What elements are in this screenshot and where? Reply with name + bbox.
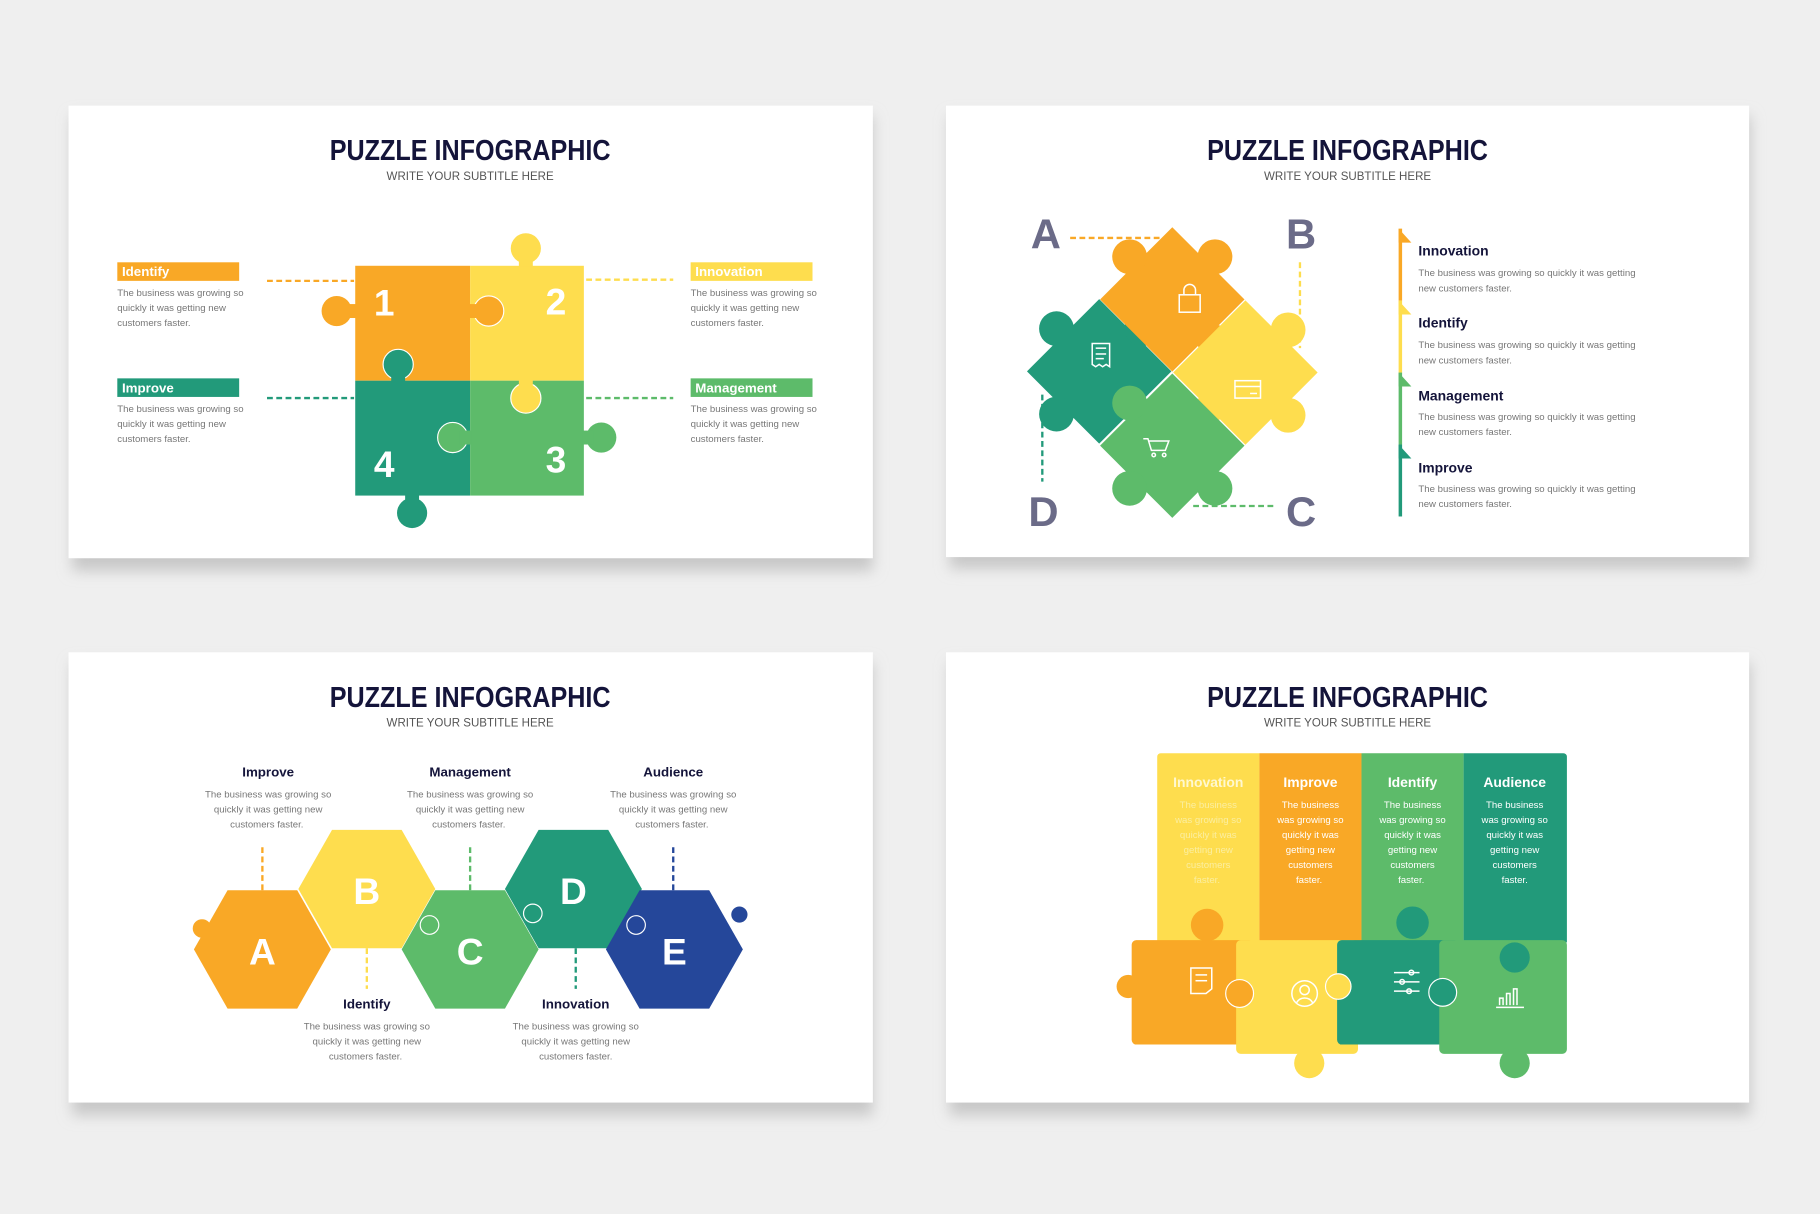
corner letters: C (1286, 488, 1316, 535)
hexagons: C (457, 930, 484, 972)
puzzle square: 3 (546, 438, 566, 480)
bottom puzzle pieces (1117, 906, 1567, 1078)
panel 4: column puzzle (946, 652, 1749, 1103)
timeline: The business was growing so quickly it was getting (1418, 484, 1636, 495)
label: Improve: customers faster. (117, 434, 191, 445)
labels 3: Innovation (542, 997, 609, 1012)
hexagons: E (662, 930, 687, 972)
timeline: new customers faster. (1418, 427, 1512, 438)
label: Management: quickly it was getting new (691, 419, 799, 430)
column texts: Identify (1388, 774, 1438, 790)
label: Identify: The business was growing so (117, 288, 244, 299)
timeline: new customers faster. (1418, 499, 1512, 510)
column texts: faster. (1194, 875, 1220, 886)
labels 3: customers faster. (432, 820, 505, 831)
dashed connectors (267, 280, 673, 398)
column texts: The business (1384, 800, 1441, 811)
timeline: Identify (1418, 314, 1468, 330)
column texts: customers (1492, 860, 1537, 871)
column texts: getting new (1490, 845, 1539, 856)
hexagons (193, 830, 748, 1009)
label: Identify: Identify (122, 264, 170, 279)
labels 3: quickly it was getting new (521, 1037, 630, 1048)
label: Improve (117, 378, 244, 445)
subtitle 3: WRITE YOUR SUBTITLE HERE (387, 717, 554, 730)
columns (1157, 753, 1567, 942)
column texts: faster. (1502, 875, 1528, 886)
label: Improve: Improve (122, 380, 174, 395)
puzzle square: 2 (546, 281, 566, 323)
panel 2: diamond puzzle (946, 106, 1749, 557)
column texts: was growing so (1481, 815, 1548, 826)
label: Innovation: Innovation (695, 264, 763, 279)
label: Identify: quickly it was getting new (117, 303, 226, 314)
column texts: getting new (1388, 845, 1437, 856)
column texts: customers (1186, 860, 1231, 871)
labels 3: The business was growing so (304, 1021, 430, 1032)
column texts (1173, 774, 1548, 886)
puzzle square: 1 (374, 282, 395, 324)
labels 3: quickly it was getting new (313, 1037, 421, 1048)
icons (1191, 968, 1524, 1007)
column texts: quickly it was (1486, 830, 1543, 841)
corner letters: A (1031, 210, 1061, 257)
icon: card (1235, 381, 1261, 398)
column texts: Improve (1283, 774, 1338, 790)
timeline: Management (1418, 387, 1504, 403)
timeline: The business was growing so quickly it was getting (1418, 412, 1636, 423)
labels 3: Identify (343, 997, 391, 1012)
corner letters: D (1028, 488, 1059, 535)
label: Identify: customers faster. (117, 318, 191, 329)
icon: cart (1143, 439, 1169, 457)
column texts: The business (1180, 800, 1237, 811)
labels 3: Improve (242, 764, 294, 779)
labels 3: The business was growing so (610, 789, 736, 800)
labels 3: quickly it was getting new (214, 804, 323, 815)
puzzle diamond (989, 189, 1355, 556)
labels 3: customers faster. (329, 1052, 402, 1063)
title 1: PUZZLE INFOGRAPHIC (330, 135, 611, 167)
labels 3: customers faster. (539, 1052, 612, 1063)
shadows (72, 116, 1750, 1115)
subtitle 1: WRITE YOUR SUBTITLE HERE (387, 170, 554, 183)
label: Improve: The business was growing so (117, 404, 244, 415)
labels 3: customers faster. (635, 820, 709, 831)
timeline: Innovation (1418, 242, 1489, 258)
puzzle square: 4 (374, 443, 395, 485)
label: Innovation (691, 262, 817, 329)
label: Improve: quickly it was getting new (117, 419, 226, 430)
subtitle 4: WRITE YOUR SUBTITLE HERE (1264, 717, 1431, 730)
column texts: Innovation (1173, 774, 1243, 790)
column texts: was growing so (1378, 815, 1446, 826)
hexagons: A (249, 930, 276, 972)
dashed connectors 3 (262, 847, 673, 989)
labels 3: The business was growing so (513, 1021, 639, 1032)
column texts: was growing so (1276, 815, 1344, 826)
timeline: The business was growing so quickly it was getting (1418, 340, 1636, 351)
corner letters: B (1286, 210, 1316, 257)
column texts: getting new (1184, 845, 1233, 856)
timeline (1399, 229, 1636, 516)
column texts: was growing so (1174, 815, 1241, 826)
labels 3: Audience (643, 764, 703, 779)
label: Management (691, 378, 817, 445)
column texts: The business (1282, 800, 1339, 811)
labels 3: The business was growing so (205, 789, 331, 800)
label: Innovation: quickly it was getting new (691, 303, 799, 314)
column texts: Audience (1483, 774, 1546, 790)
hexagons: D (560, 870, 587, 912)
labels 3: customers faster. (230, 820, 303, 831)
label: Management: The business was growing so (691, 404, 817, 415)
column texts: quickly it was (1282, 830, 1339, 841)
column texts: customers (1390, 860, 1435, 871)
label: Innovation: The business was growing so (691, 288, 817, 299)
title 4: PUZZLE INFOGRAPHIC (1207, 682, 1488, 714)
corner letters (1028, 210, 1316, 535)
timeline: Improve (1418, 459, 1473, 475)
column texts: The business (1486, 800, 1543, 811)
title 3: PUZZLE INFOGRAPHIC (330, 682, 611, 714)
puzzle square (322, 233, 616, 528)
label: Identify (117, 262, 244, 329)
labels 3: Management (429, 764, 511, 779)
labels 3: quickly it was getting new (416, 804, 524, 815)
label: Innovation: customers faster. (691, 318, 764, 329)
column texts: getting new (1286, 845, 1335, 856)
hexagons: B (353, 870, 380, 912)
title 2: PUZZLE INFOGRAPHIC (1207, 135, 1488, 167)
column texts: quickly it was (1384, 830, 1441, 841)
column texts: faster. (1398, 875, 1424, 886)
column texts: quickly it was (1180, 830, 1237, 841)
label: Management: Management (695, 380, 777, 395)
column texts: faster. (1296, 875, 1322, 886)
icon: bag (1179, 284, 1200, 312)
timeline: new customers faster. (1418, 283, 1512, 294)
icon: receipt (1092, 344, 1110, 367)
timeline: new customers faster. (1418, 355, 1512, 366)
subtitle 2: WRITE YOUR SUBTITLE HERE (1264, 170, 1431, 183)
panel 3: hexagon puzzle (69, 652, 873, 1103)
labels 3: quickly it was getting new (619, 804, 728, 815)
column texts: customers (1288, 860, 1333, 871)
panel 1: square puzzle (69, 106, 873, 558)
labels 3: The business was growing so (407, 789, 533, 800)
label: Management: customers faster. (691, 434, 764, 445)
labels 3 (205, 764, 736, 1063)
timeline: The business was growing so quickly it was getting (1418, 268, 1636, 279)
dashed connectors 2 (1042, 238, 1300, 506)
